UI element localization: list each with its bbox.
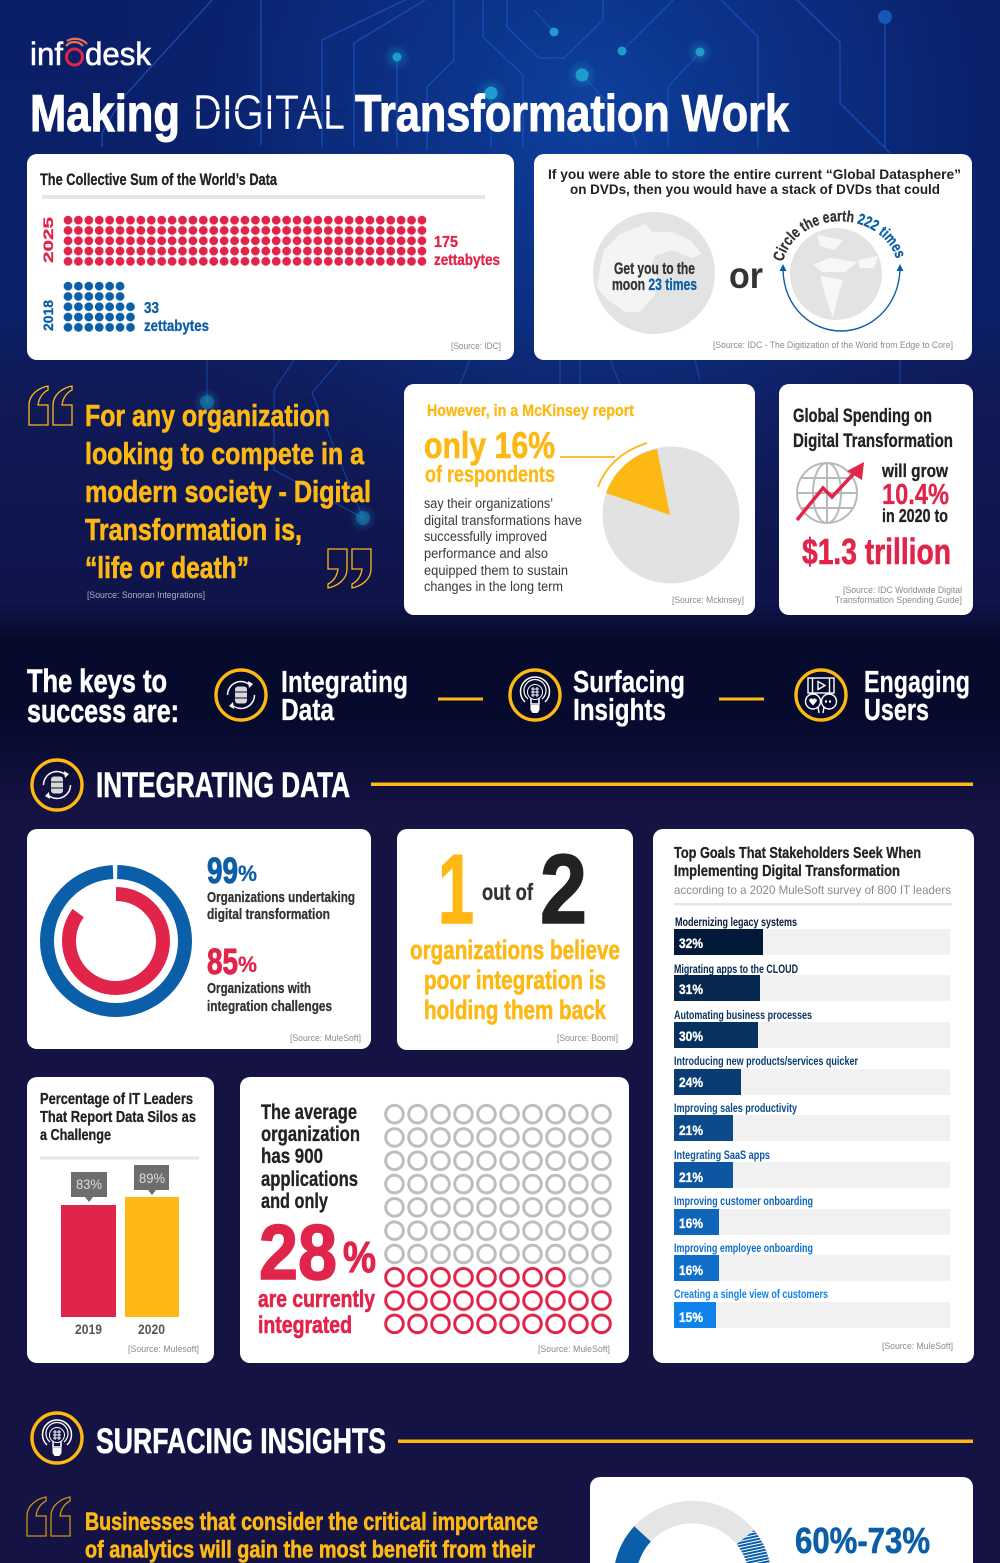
bar: introducing new products 24%: Introducing new products/services quicker bbox=[674, 1056, 858, 1068]
ring grid: 28 of 100 bbox=[383, 1102, 613, 1336]
stat: 1 out of 2 bbox=[438, 834, 587, 944]
bar: 2020 89%: 2020 bbox=[138, 1321, 165, 1337]
stat: 1 out of 2: 1 bbox=[438, 834, 474, 944]
stat: 28%: % bbox=[343, 1233, 376, 1282]
globe: circle the earth: Circle the earth 222 times bbox=[774, 210, 904, 260]
bar: improving sales productivity 21%: Improving sales productivity bbox=[674, 1103, 797, 1115]
body text: say their organizations’ bbox=[424, 496, 553, 511]
quote text: modern society - Digital bbox=[85, 474, 371, 509]
section heading: integrating data: INTEGRATING DATA bbox=[96, 766, 350, 805]
statement: poor integration is bbox=[424, 965, 606, 995]
bar: 2019 83% bbox=[61, 1172, 116, 1337]
stat: only 16%: of respondents bbox=[425, 461, 555, 487]
bar: modernizing legacy systems 32%: Modernizing legacy systems bbox=[675, 917, 797, 929]
logo: infodesk: desk bbox=[85, 36, 152, 72]
panel: the collective sum of the world's data bbox=[27, 154, 514, 360]
panel: 99% and 85% bbox=[27, 829, 371, 1049]
bar: 2020 89% bbox=[125, 1165, 179, 1337]
quote text: Transformation is, bbox=[85, 512, 302, 547]
stat: 85%: 85 bbox=[207, 941, 238, 982]
stat: 1 out of 2: 2 bbox=[540, 834, 587, 944]
bar: improving sales productivity 21%: 21% bbox=[679, 1122, 703, 1138]
stat: 99%: % bbox=[238, 861, 257, 886]
icon: globe with rising arrow bbox=[797, 462, 864, 523]
stat: 60%-73%: 60%-73% bbox=[795, 1520, 930, 1561]
bar: improving employee onboarding 16% bbox=[674, 1243, 950, 1281]
heading: keys to success: The keys to bbox=[27, 663, 167, 699]
stat: 99%: 99 bbox=[207, 850, 238, 891]
panel: global datasphere on dvds bbox=[534, 154, 972, 360]
bar: automating business processes 30%: Automating business processes bbox=[674, 1010, 812, 1022]
bar: modernizing legacy systems 32% bbox=[674, 917, 950, 955]
bar: improving employee onboarding 16%: 16% bbox=[679, 1262, 703, 1278]
bar: migrating apps to the cloud 31%: 31% bbox=[679, 981, 703, 997]
quote text: For any organization bbox=[85, 398, 330, 433]
pie chart: 16% bbox=[560, 443, 740, 584]
donut chart bbox=[46, 871, 186, 1011]
heading bbox=[40, 1091, 196, 1144]
panel: top goals bbox=[653, 829, 974, 1363]
key: surfacing insights: Surfacing bbox=[573, 664, 685, 699]
heading: Implementing Digital Transformation bbox=[674, 863, 900, 880]
stat: 28%: are currently bbox=[258, 1286, 376, 1313]
bar: improving customer onboarding 16%: Improving customer onboarding bbox=[674, 1196, 813, 1208]
quote text 2 bbox=[85, 1508, 538, 1563]
source: [Source: Boomi] bbox=[557, 1033, 618, 1044]
stat: 85% bbox=[207, 941, 332, 1015]
stat: will grow 10.4%: will grow bbox=[881, 460, 949, 481]
icon: integrating data bbox=[216, 670, 266, 720]
bar: creating a single view 15%: 15% bbox=[679, 1309, 703, 1325]
stat: 99% bbox=[207, 850, 355, 923]
bar: integrating saas apps 21%: Integrating SaaS apps bbox=[674, 1150, 770, 1162]
bar: improving sales productivity 21% bbox=[674, 1103, 950, 1141]
dot chart: 2025 175 zettabytes: zettabytes bbox=[434, 252, 500, 269]
donut chart bbox=[615, 1501, 770, 1563]
dot chart: 2018 33 zettabytes bbox=[40, 281, 209, 335]
heading: That Report Data Silos as bbox=[40, 1109, 196, 1126]
heading: keys to success: success are: bbox=[27, 693, 179, 729]
panel: 1 out of 2 bbox=[397, 829, 633, 1050]
logo: infodesk: inf bbox=[30, 36, 63, 72]
source: [Source: MuleSoft] bbox=[882, 1341, 953, 1352]
icon: surfacing insights bbox=[510, 670, 560, 720]
stat: 99%: Organizations undertaking bbox=[207, 889, 355, 906]
heading: The Collective Sum of the World’s Data bbox=[40, 171, 278, 189]
bar: creating a single view 15%: Creating a single view of customers bbox=[674, 1289, 828, 1301]
section heading: surfacing insights bbox=[32, 1413, 973, 1463]
source: [Source: IDC] bbox=[451, 341, 501, 352]
dot chart: 2018 33 zettabytes: 33 bbox=[144, 300, 159, 317]
bar: introducing new products 24% bbox=[674, 1056, 950, 1095]
source bbox=[835, 585, 962, 606]
key: surfacing insights: Insights bbox=[573, 692, 666, 727]
key: integrating data: Data bbox=[281, 692, 335, 727]
quote text: looking to compete in a bbox=[85, 436, 365, 471]
section heading: integrating data bbox=[32, 760, 973, 810]
bar: improving customer onboarding 16% bbox=[674, 1196, 950, 1235]
or: or bbox=[729, 255, 763, 296]
bar: 2019 83%: 83% bbox=[76, 1176, 102, 1192]
stat: 99%: digital transformation bbox=[207, 906, 330, 923]
bar: improving employee onboarding 16%: Improving employee onboarding bbox=[674, 1243, 813, 1255]
key: integrating data bbox=[281, 664, 408, 727]
section heading: surfacing insights: SURFACING INSIGHTS bbox=[96, 1422, 386, 1461]
quote text: “life or death” bbox=[85, 550, 249, 585]
quote text 2: of analytics will gain the most benefit from their bbox=[85, 1536, 535, 1563]
globe: circle the earth bbox=[774, 210, 904, 332]
title: Making bbox=[30, 85, 180, 143]
stat: will grow 10.4%: 10.4% bbox=[882, 479, 949, 511]
bar: automating business processes 30% bbox=[674, 1010, 950, 1048]
panel: global spending bbox=[779, 384, 973, 615]
text: the average organization: and only bbox=[261, 1190, 328, 1213]
source: Transformation Spending Guide] bbox=[835, 595, 962, 606]
body text bbox=[424, 496, 582, 594]
icon: opening quote 2 bbox=[27, 1497, 70, 1536]
statement: holding them back bbox=[424, 995, 607, 1025]
source: [Source: Mulesoft] bbox=[128, 1344, 199, 1355]
heading: keys to success bbox=[27, 663, 179, 729]
bar: modernizing legacy systems 32%: 32% bbox=[679, 935, 703, 951]
stat: only 16% bbox=[424, 425, 555, 487]
text: the average organization: organization bbox=[261, 1123, 360, 1146]
keys to success row bbox=[27, 663, 970, 729]
panel: 900 applications bbox=[240, 1077, 629, 1363]
quote source: [Source: Sonoran Integrations] bbox=[87, 590, 205, 601]
panel: mckinsey report bbox=[404, 384, 755, 615]
heading: Percentage of IT Leaders bbox=[40, 1091, 193, 1108]
body text: performance and also bbox=[424, 546, 548, 561]
heading: a Challenge bbox=[40, 1127, 111, 1144]
source: [Source: Mckinsey] bbox=[672, 595, 744, 606]
key: surfacing insights bbox=[573, 664, 685, 727]
globe: moon: moon 23 times bbox=[612, 276, 697, 294]
bar: introducing new products 24%: 24% bbox=[679, 1074, 703, 1090]
heading: Global Spending on bbox=[793, 405, 932, 427]
key: engaging users bbox=[864, 664, 970, 727]
heading: Digital Transformation bbox=[793, 430, 953, 452]
heading: If you were able to store the entire current “Global Datasphere” bbox=[548, 167, 961, 182]
text: the average organization: has 900 bbox=[261, 1145, 323, 1168]
heading: on DVDs, then you would have a stack of DVDs that could bbox=[570, 182, 940, 197]
title: Transformation Work bbox=[355, 85, 789, 143]
stat: 85%: % bbox=[238, 952, 257, 977]
quote text 2: Businesses that consider the critical importance bbox=[85, 1508, 538, 1536]
heading: Top Goals That Stakeholders Seek When bbox=[674, 845, 921, 862]
bar: automating business processes 30%: 30% bbox=[679, 1028, 703, 1044]
heading bbox=[793, 405, 953, 452]
stat: 85%: integration challenges bbox=[207, 998, 332, 1015]
heading: However, in a McKinsey report bbox=[427, 401, 634, 420]
panel: 60%-73% bbox=[590, 1477, 973, 1563]
heading bbox=[674, 845, 951, 897]
bar: improving customer onboarding 16%: 16% bbox=[679, 1215, 703, 1231]
bar: integrating saas apps 21% bbox=[674, 1150, 950, 1188]
bar: creating a single view 15% bbox=[674, 1289, 950, 1328]
icon: closing quote bbox=[328, 549, 371, 588]
stat: will grow 10.4% bbox=[881, 460, 949, 526]
bar: 2020 89%: 89% bbox=[139, 1170, 165, 1186]
icon: opening quote bbox=[29, 386, 72, 425]
icon: engaging users bbox=[796, 670, 846, 720]
text: the average organization bbox=[261, 1101, 360, 1213]
heading bbox=[548, 167, 961, 197]
title: DIGITAL bbox=[193, 86, 345, 140]
globe: moon bbox=[593, 212, 715, 334]
statement bbox=[410, 935, 620, 1025]
bar: integrating saas apps 21%: 21% bbox=[679, 1169, 703, 1185]
text: the average organization: The average bbox=[261, 1101, 357, 1124]
stat: will grow 10.4%: in 2020 to bbox=[882, 505, 948, 526]
stat: only 16%: only 16% bbox=[424, 425, 555, 466]
panel: data silos bbox=[27, 1077, 214, 1363]
stat: 28%: integrated bbox=[258, 1312, 352, 1339]
source: [Source: MuleSoft] bbox=[538, 1344, 610, 1355]
body text: digital transformations have bbox=[424, 513, 582, 528]
statement: organizations believe bbox=[410, 935, 620, 965]
dot chart: 2018 33 zettabytes: zettabytes bbox=[144, 318, 209, 335]
title bbox=[30, 85, 789, 143]
dot chart: 2025 175 zettabytes: 2025 bbox=[40, 217, 56, 263]
quote text bbox=[85, 398, 371, 585]
body text: equipped them to sustain bbox=[424, 563, 568, 578]
logo: infodesk bbox=[30, 36, 152, 72]
source: [Source: IDC Worldwide Digital bbox=[843, 585, 962, 596]
stat: 1 out of 2: out of bbox=[482, 879, 533, 905]
dot chart: 2018 33 zettabytes: 2018 bbox=[40, 300, 56, 331]
text: the average organization: applications bbox=[261, 1168, 358, 1191]
source: [Source: MuleSoft] bbox=[290, 1033, 361, 1044]
globe: moon: Get you to the bbox=[614, 260, 695, 278]
body text: changes in the long term bbox=[424, 579, 563, 594]
bar: migrating apps to the cloud 31% bbox=[674, 964, 950, 1001]
bar: 2019 83%: 2019 bbox=[75, 1321, 102, 1337]
stat: 28% bbox=[258, 1208, 376, 1339]
heading: according to a 2020 MuleSoft survey of 800 IT leaders bbox=[674, 883, 951, 897]
key: integrating data: Integrating bbox=[281, 664, 408, 699]
dot chart: 2025 175 zettabytes bbox=[40, 215, 500, 269]
stat: 28%: 28 bbox=[259, 1208, 337, 1296]
dot chart: 2025 175 zettabytes: 175 bbox=[434, 234, 458, 251]
stat: 85%: Organizations with bbox=[207, 980, 311, 997]
bar: migrating apps to the cloud 31%: Migrating apps to the CLOUD bbox=[674, 964, 798, 976]
body text: successfully improved bbox=[424, 529, 547, 544]
source: [Source: IDC - The Digitization of the World from Edge to Core] bbox=[713, 340, 953, 351]
stat: $1.3 trillion: $1.3 trillion bbox=[802, 531, 951, 572]
key: engaging users: Users bbox=[864, 692, 929, 727]
